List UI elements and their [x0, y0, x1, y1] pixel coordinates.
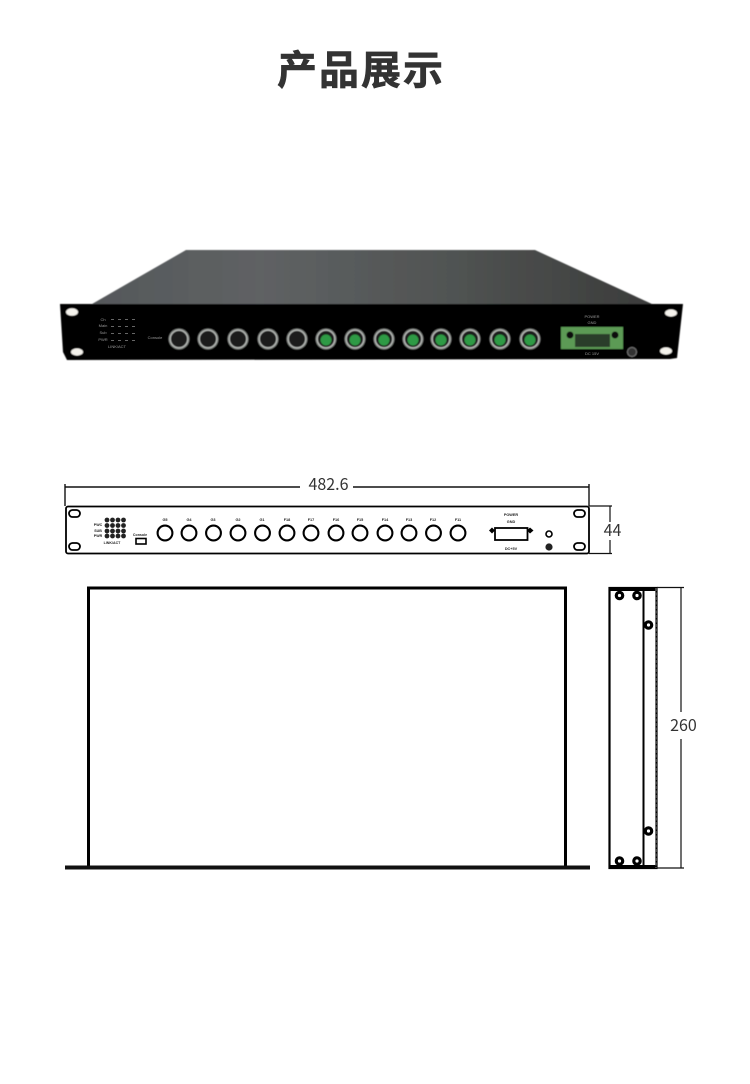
- green power terminal: [561, 327, 623, 349]
- port labels: F12: [430, 518, 436, 522]
- LED labels: SUB: [94, 529, 102, 533]
- LED matrix: [105, 518, 126, 538]
- rack ear holes: [69, 510, 585, 550]
- front panel drawing: [66, 506, 589, 554]
- dimension: height 44: 44: [604, 517, 621, 541]
- indicator and ground: [545, 531, 553, 551]
- panel labels: Ch: [100, 317, 106, 322]
- port labels: G5: [162, 518, 168, 522]
- title: 产品展示: [277, 38, 445, 96]
- copper ports: [168, 328, 308, 350]
- LED labels: PWR: [94, 534, 103, 538]
- panel labels: LINK/ACT: [108, 344, 127, 349]
- port labels: G1: [259, 518, 265, 522]
- port labels: [162, 513, 518, 551]
- LED labels: LINK/ACT: [104, 541, 121, 545]
- green fibre ports: [316, 328, 540, 350]
- dimension: depth 260: [657, 588, 697, 868]
- ground screw: [628, 348, 636, 356]
- port labels: DC+5V: [505, 547, 518, 551]
- chassis top surface: [92, 250, 652, 304]
- port labels: POWER: [504, 513, 518, 517]
- power connector: [489, 528, 534, 540]
- product photo: [60, 250, 683, 360]
- panel labels: [98, 314, 600, 356]
- dimension: depth 260: 260: [670, 712, 697, 736]
- LED labels: [94, 523, 147, 545]
- panel labels: Sub: [99, 330, 107, 335]
- LED labels: Console: [133, 533, 147, 537]
- dimension: width 482.6: [65, 471, 589, 506]
- screws: [616, 592, 652, 864]
- port labels: GND: [507, 520, 515, 524]
- dimension: width 482.6: 482.6: [309, 471, 349, 495]
- panel labels: GND: [588, 320, 597, 325]
- dimension: height 44: [589, 506, 621, 554]
- port labels: F11: [455, 518, 461, 522]
- panel labels: PWR: [98, 337, 108, 342]
- port labels: F18: [284, 518, 290, 522]
- port labels: G3: [210, 518, 216, 522]
- panel labels: POWER: [584, 314, 600, 319]
- fibre ports: [158, 526, 465, 540]
- status LEDs: [111, 319, 135, 341]
- port labels: F15: [357, 518, 363, 522]
- port labels: G2: [235, 518, 241, 522]
- LED labels: PWC: [94, 523, 103, 527]
- port labels: G4: [186, 518, 192, 522]
- top view drawing: [65, 588, 590, 870]
- console port: [136, 538, 146, 544]
- port labels: F13: [406, 518, 412, 522]
- rack ear holes: [66, 308, 677, 356]
- port labels: F17: [308, 518, 314, 522]
- front panel: [60, 304, 683, 360]
- port labels: F14: [382, 518, 389, 522]
- panel labels: Main: [99, 323, 107, 328]
- panel labels: DC 15V: [585, 351, 599, 356]
- port labels: F16: [333, 518, 339, 522]
- side view drawing: [609, 588, 657, 868]
- panel labels: Console: [148, 335, 163, 340]
